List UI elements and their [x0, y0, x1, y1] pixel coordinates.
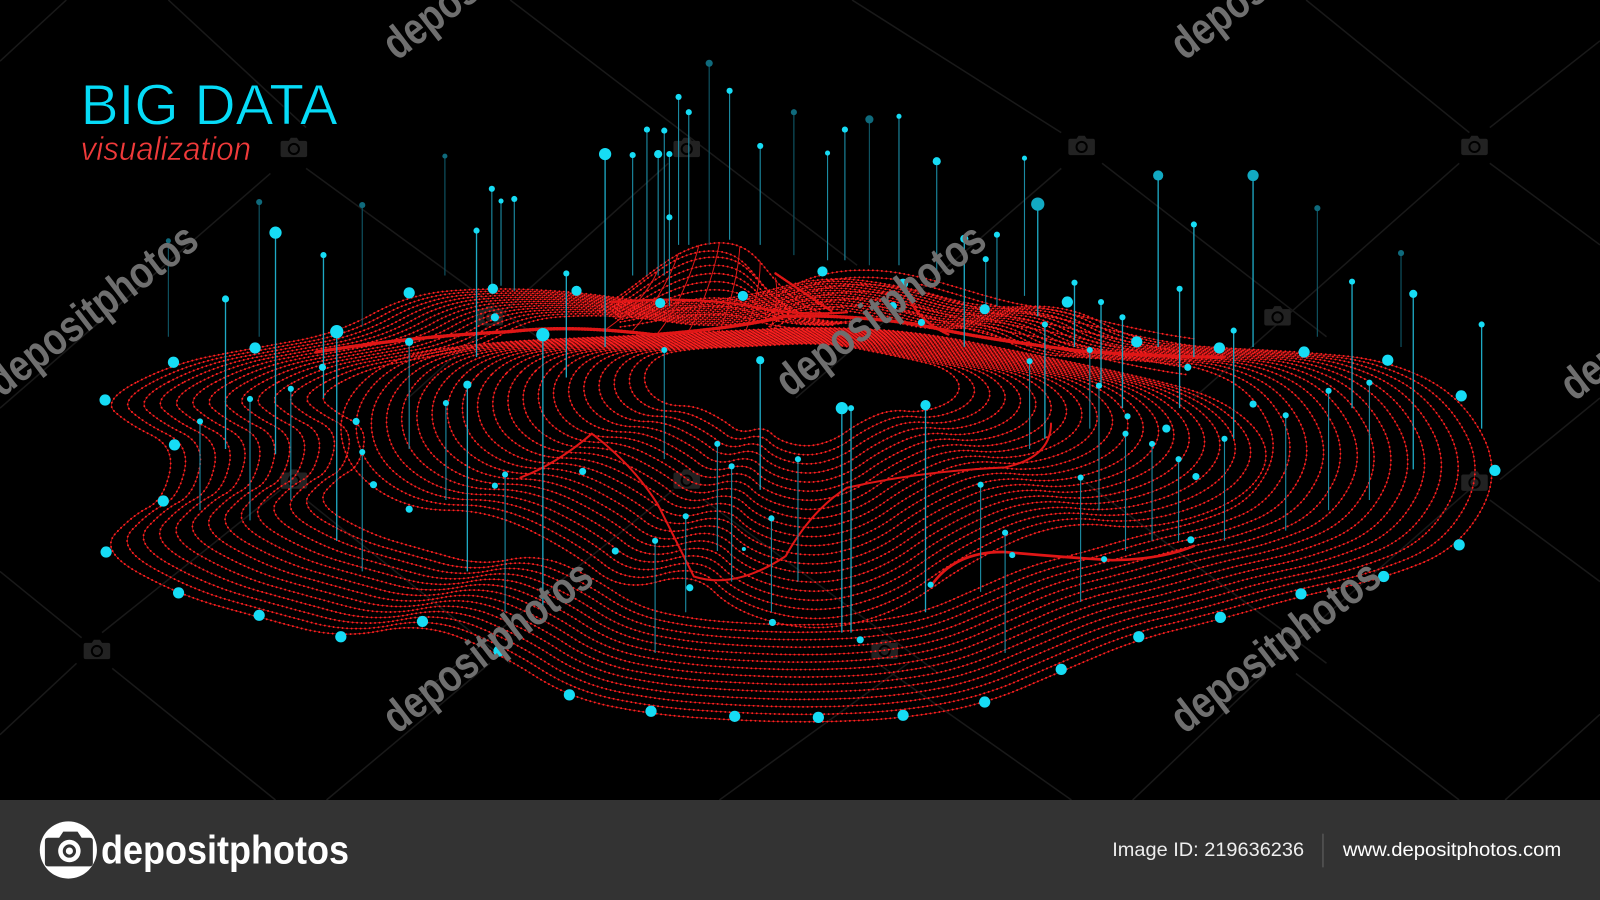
footer bar — [0, 800, 1600, 900]
footer logo — [40, 821, 349, 879]
data pins: bright heads — [197, 88, 1485, 643]
bright ridges — [316, 273, 1224, 587]
website url: www.depositphotos.com — [1342, 839, 1561, 861]
subtitle: visualization — [81, 131, 251, 168]
watermark: centre: depositphotos — [765, 213, 995, 406]
hump: dome mesh — [600, 243, 867, 335]
contour mesh: inner rings around the central hole — [341, 328, 1266, 628]
hump: right back ridge mesh — [767, 270, 1194, 374]
watermark: bottom right: depositphotos — [1160, 549, 1390, 743]
camera watermark icons — [84, 136, 1488, 659]
title: BIG DATA — [81, 73, 338, 137]
data pins: dim heads — [166, 60, 1404, 256]
data pins: dim back stems — [168, 63, 1401, 347]
data pins: mid stems — [200, 91, 1369, 653]
footer divider — [1322, 834, 1323, 867]
surface edge nodes — [99, 266, 1501, 723]
footer logo: depositphotos — [101, 828, 349, 872]
image id: Image ID: 219636236 — [1112, 839, 1304, 861]
data pins: bright stems — [226, 154, 1482, 633]
contour mesh: outer wavy surface — [111, 279, 1492, 722]
watermark: bottom left: depositphotos — [372, 549, 602, 743]
